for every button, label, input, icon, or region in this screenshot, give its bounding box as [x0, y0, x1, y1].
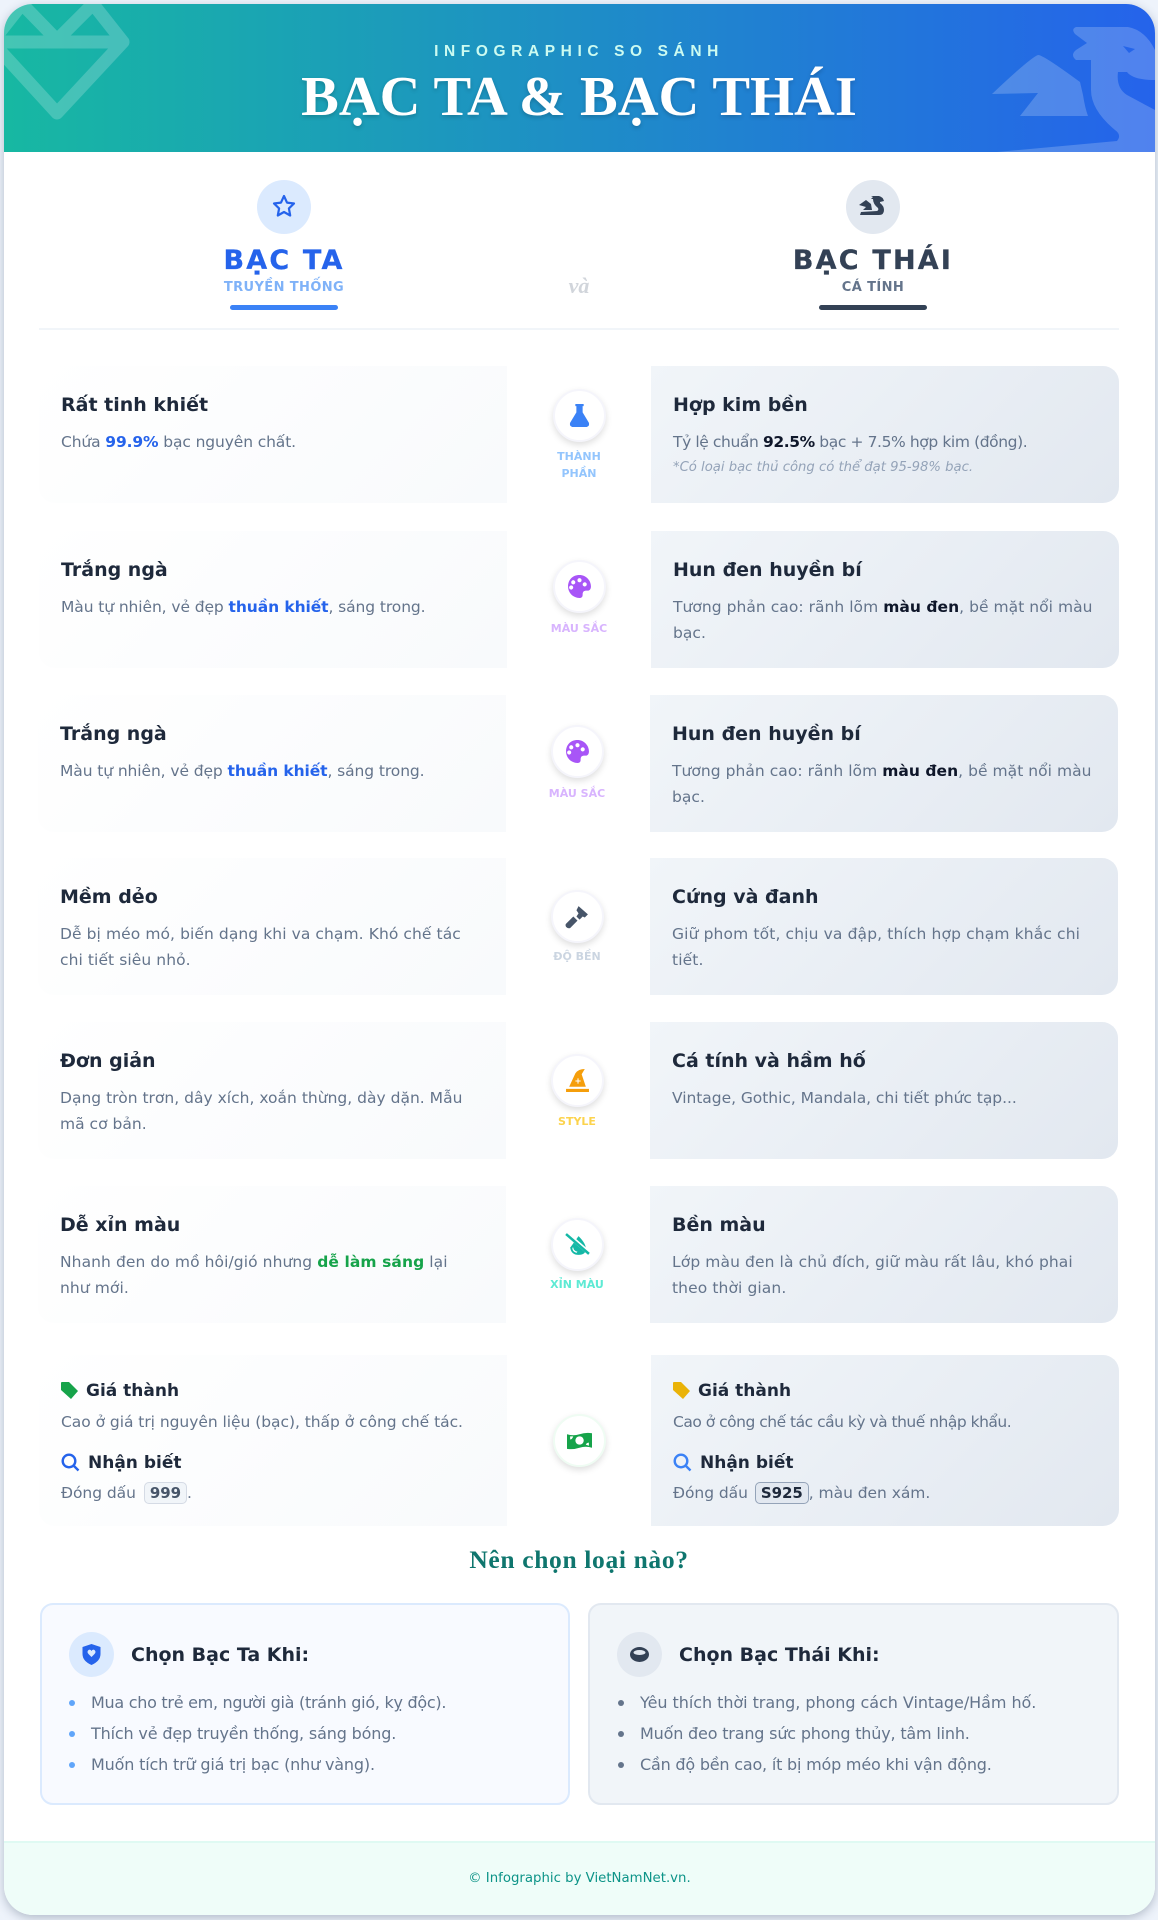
- icon: search: [674, 1454, 692, 1472]
- credit: © Infographic by VietNamNet.vn.: [468, 1871, 691, 1886]
- label: thành phần: THÀNH: [557, 450, 601, 463]
- text: Tương phản cao: rãnh lõm màu đen, bề mặt nổi màu: [672, 762, 1092, 780]
- list: Cần độ bền cao, ít bị móp méo khi vận động.: [640, 1755, 992, 1774]
- text: Cao ở công chế tác cầu kỳ và thuế nhập khẩu.: [673, 1413, 1011, 1431]
- heading: Đơn giản: [60, 1050, 156, 1072]
- heading: Nhận biết: [88, 1453, 181, 1473]
- icon: wizard hat: [551, 1054, 604, 1107]
- panel: Trắng ngà (repeat): [38, 695, 506, 832]
- panel: Hun đen huyền bí (repeat): [650, 695, 1118, 832]
- icon: palette: [551, 725, 604, 778]
- heading: Hun đen huyền bí: [673, 559, 862, 581]
- footer: [4, 1841, 1155, 1915]
- label: màu sắc: MÀU SẮC: [549, 787, 605, 800]
- heading: Chọn Bạc Ta Khi:: [131, 1644, 309, 1666]
- name: BẠC THÁI: [793, 245, 953, 276]
- text: [672, 925, 1080, 969]
- text: mã cơ bản.: [60, 1115, 147, 1133]
- icon: ring: [617, 1632, 662, 1677]
- text: [672, 1253, 1073, 1297]
- list: Muốn đeo trang sức phong thủy, tâm linh.: [640, 1724, 970, 1743]
- heading: Giá thành: [698, 1381, 791, 1401]
- text: bạc.: [673, 624, 706, 642]
- label: thành phần: PHẦN: [562, 467, 596, 480]
- text: chi tiết siêu nhỏ.: [60, 951, 191, 969]
- column heading: Bạc Thái: [793, 180, 953, 310]
- label: xỉn màu: XỈN MÀU: [550, 1278, 604, 1291]
- "và" separator: và: [569, 273, 589, 298]
- icon: palette: [553, 560, 606, 613]
- subtitle: TRUYỀN THỐNG: [224, 280, 344, 295]
- underline: [819, 305, 927, 310]
- icon: shield: [69, 1632, 114, 1677]
- underline: [230, 305, 338, 310]
- panel: Hợp kim bền: [651, 366, 1119, 503]
- heading: Hợp kim bền: [673, 394, 808, 416]
- heading: Bền màu: [672, 1214, 766, 1236]
- panel: Chọn Bạc Thái Khi: [588, 1603, 1119, 1805]
- text: [60, 925, 461, 969]
- text: bạc.: [672, 788, 705, 806]
- label: style: STYLE: [558, 1115, 596, 1128]
- panel: Đơn giản: [38, 1022, 506, 1159]
- panel: giá thành & nhận biết (Bạc Ta): [39, 1355, 507, 1526]
- text: như mới.: [60, 1279, 129, 1297]
- icon: droplet slash: [551, 1218, 604, 1271]
- panel: giá thành & nhận biết (Bạc Thái): [651, 1355, 1119, 1526]
- icon: tag: [673, 1382, 690, 1399]
- text: [672, 598, 1093, 642]
- heading: Trắng ngà: [60, 723, 167, 745]
- header banner: [4, 4, 1155, 152]
- heading: Cứng và đanh: [672, 886, 819, 908]
- name: BẠC TA: [223, 245, 345, 276]
- text: Vintage, Gothic, Mandala, chi tiết phức tạp...: [672, 1089, 1017, 1107]
- text: Đóng dấu 999 .: [61, 1484, 192, 1502]
- panel: Trắng ngà: [39, 531, 507, 668]
- icon: flask: [553, 389, 606, 442]
- section heading: Nên chọn loại nào?: [469, 1545, 689, 1574]
- heading: Cá tính và hầm hố: [672, 1050, 866, 1072]
- heading: Mềm dẻo: [60, 886, 158, 908]
- list: Mua cho trẻ em, người già (tránh gió, kỵ độc).: [91, 1693, 446, 1712]
- icon: search: [62, 1454, 80, 1472]
- title: BẠC TA & BẠC THÁI: [301, 66, 857, 128]
- list: [69, 1693, 446, 1774]
- text: [60, 1089, 462, 1133]
- panel: Cá tính và hầm hố: [650, 1022, 1118, 1159]
- text: theo thời gian.: [672, 1279, 786, 1297]
- label: độ bền: ĐỘ BỀN: [553, 950, 601, 963]
- panel: Dễ xỉn màu: [38, 1186, 506, 1323]
- heading: Nhận biết: [700, 1453, 793, 1473]
- heading: Chọn Bạc Thái Khi:: [679, 1644, 880, 1666]
- icon: tag: [61, 1382, 78, 1399]
- text: Màu tự nhiên, vẻ đẹp thuần khiết, sáng trong.: [61, 598, 426, 616]
- label: thành phần: [557, 450, 601, 480]
- panel: Rất tinh khiết: [39, 366, 507, 503]
- text: Đóng dấu S925 , màu đen xám.: [673, 1484, 930, 1502]
- text: Chứa 99.9% bạc nguyên chất.: [61, 433, 296, 451]
- list: Thích vẻ đẹp truyền thống, sáng bóng.: [91, 1724, 396, 1743]
- label: màu sắc: MÀU SẮC: [551, 622, 607, 635]
- text: Dạng tròn trơn, dây xích, xoắn thừng, dày dặn. Mẫu: [60, 1089, 462, 1107]
- heading: Dễ xỉn màu: [60, 1214, 180, 1236]
- panel: Bền màu: [650, 1186, 1118, 1323]
- text: Cao ở giá trị nguyên liệu (bạc), thấp ở công chế tác.: [61, 1413, 463, 1431]
- panel: Chọn Bạc Ta Khi: [40, 1603, 570, 1805]
- heading: Giá thành: [86, 1381, 179, 1401]
- heading: Hun đen huyền bí: [672, 723, 861, 745]
- icon: gem watermark: [4, 4, 1155, 152]
- column heading: Bạc Ta: [223, 180, 345, 310]
- text: Dễ bị méo mó, biến dạng khi va chạm. Khó chế tác: [60, 925, 461, 943]
- panel: Hun đen huyền bí: [651, 531, 1119, 668]
- text: Tương phản cao: rãnh lõm màu đen, bề mặt nổi màu: [673, 598, 1093, 616]
- text: tiết.: [672, 951, 704, 969]
- text: [60, 1253, 448, 1297]
- text: Giữ phom tốt, chịu va đập, thích hợp chạm khắc chi: [672, 925, 1080, 943]
- text: Tỷ lệ chuẩn 92.5% bạc + 7.5% hợp kim (đồng).: [673, 433, 1027, 451]
- heading: Rất tinh khiết: [61, 394, 208, 416]
- text: [672, 762, 1092, 806]
- panel: Mềm dẻo: [38, 858, 506, 995]
- text: Nhanh đen do mồ hôi/gió nhưng dễ làm sáng lại: [60, 1253, 448, 1271]
- list: Muốn tích trữ giá trị bạc (như vàng).: [91, 1755, 375, 1774]
- icon: star: [257, 180, 311, 234]
- footnote: *Có loại bạc thủ công có thể đạt 95-98% bạc.: [673, 460, 973, 475]
- icon: money: [553, 1414, 606, 1467]
- icon: gavel: [551, 890, 604, 943]
- header eyebrow: INFOGRAPHIC SO SÁNH: [434, 43, 724, 60]
- panel: Cứng và đanh: [650, 858, 1118, 995]
- subtitle: CÁ TÍNH: [842, 280, 904, 295]
- list: [618, 1693, 1036, 1774]
- heading: Trắng ngà: [61, 559, 168, 581]
- icon: dragon: [846, 180, 900, 234]
- text: Màu tự nhiên, vẻ đẹp thuần khiết, sáng trong.: [60, 762, 425, 780]
- list: Yêu thích thời trang, phong cách Vintage/Hầm hố.: [640, 1693, 1036, 1712]
- text: Lớp màu đen là chủ đích, giữ màu rất lâu, khó phai: [672, 1253, 1073, 1271]
